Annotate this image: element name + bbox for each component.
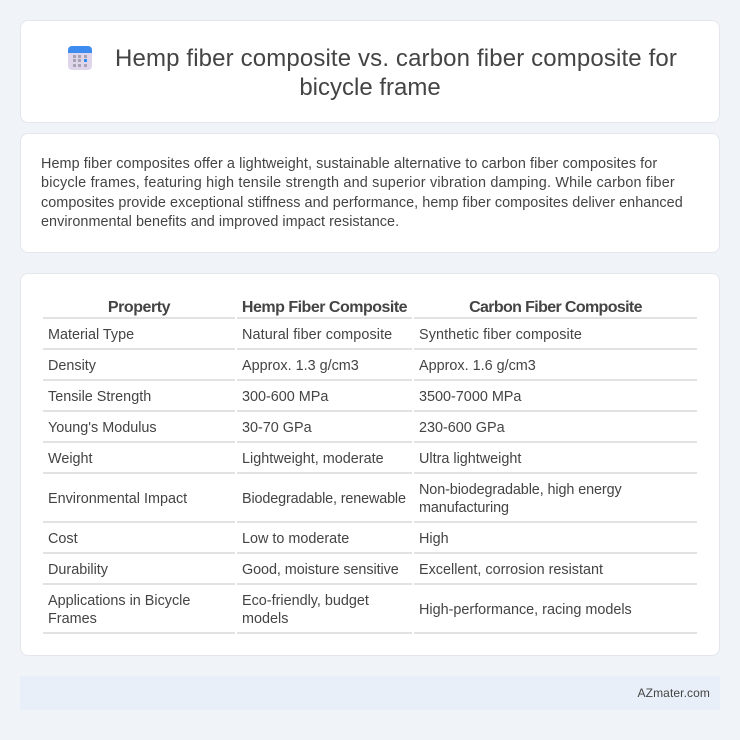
row: durability: Durability [48, 562, 108, 578]
summary text [41, 156, 683, 230]
table header: Property [108, 299, 170, 316]
row: density: Density [48, 358, 96, 374]
row: environmental impact: Environmental Impact [48, 491, 187, 507]
row: applications in bicycle frames: models [242, 611, 288, 627]
row: density: Approx. 1.3 g/cm3 [242, 358, 359, 374]
row: applications in bicycle frames [48, 593, 632, 627]
row: cost: Low to moderate [242, 531, 349, 547]
row: environmental impact [48, 482, 622, 516]
row: tensile strength: Tensile Strength [48, 389, 151, 405]
title: bicycle frame [299, 74, 441, 101]
panel: summary [20, 133, 720, 253]
footer bar [20, 676, 720, 710]
summary text: Hemp fiber composites offer a lightweight, sustainable alternative to carbon fiber composites for [41, 156, 657, 172]
table header: Hemp Fiber Composite [242, 299, 407, 316]
row: durability [48, 562, 603, 578]
row: young's modulus: Young's Modulus [48, 420, 157, 436]
row: environmental impact: Non-biodegradable, high energy [419, 482, 622, 498]
row: young's modulus [48, 420, 505, 436]
table header: Carbon Fiber Composite [469, 299, 642, 316]
row: durability: Good, moisture sensitive [242, 562, 399, 578]
row: applications in bicycle frames: Eco-friendly, budget [242, 593, 369, 609]
panel: comparison table [20, 273, 720, 656]
row: material type: Material Type [48, 327, 134, 343]
row: young's modulus: 230-600 GPa [419, 420, 505, 436]
summary text: bicycle frames, featuring high tensile strength and superior vibration damping. While carbon fiber [41, 175, 675, 191]
table header [108, 299, 642, 316]
row: weight [48, 451, 522, 467]
row: durability: Excellent, corrosion resistant [419, 562, 603, 578]
row: applications in bicycle frames: Applications in Bicycle [48, 593, 190, 609]
title [115, 45, 677, 101]
summary text: composites provide exceptional stiffness and performance, hemp fiber composites deliver enhanced [41, 195, 683, 211]
row: material type: Natural fiber composite [242, 327, 392, 343]
row: tensile strength [48, 389, 522, 405]
row: cost: High [419, 531, 449, 547]
row: material type [48, 327, 582, 343]
row: young's modulus: 30-70 GPa [242, 420, 312, 436]
row: density: Approx. 1.6 g/cm3 [419, 358, 536, 374]
comparison table [43, 299, 697, 634]
icon: calendar [68, 46, 92, 70]
row: environmental impact: Biodegradable, renewable [242, 491, 406, 507]
row: density [48, 358, 536, 374]
row: environmental impact: manufacturing [419, 500, 509, 516]
row: tensile strength: 300-600 MPa [242, 389, 328, 405]
row: applications in bicycle frames: High-performance, racing models [419, 602, 632, 618]
row: cost: Cost [48, 531, 78, 547]
row: cost [48, 531, 449, 547]
title: Hemp fiber composite vs. carbon fiber composite for [115, 45, 677, 72]
row: weight: Ultra lightweight [419, 451, 521, 467]
row: tensile strength: 3500-7000 MPa [419, 389, 521, 405]
footer text: AZmater.com: AZmater.com [638, 686, 710, 700]
row: material type: Synthetic fiber composite [419, 327, 582, 343]
row: weight: Weight [48, 451, 93, 467]
row: weight: Lightweight, moderate [242, 451, 384, 467]
row: applications in bicycle frames: Frames [48, 611, 97, 627]
title panel [20, 20, 720, 123]
summary text: environmental benefits and improved impact resistance. [41, 214, 399, 230]
